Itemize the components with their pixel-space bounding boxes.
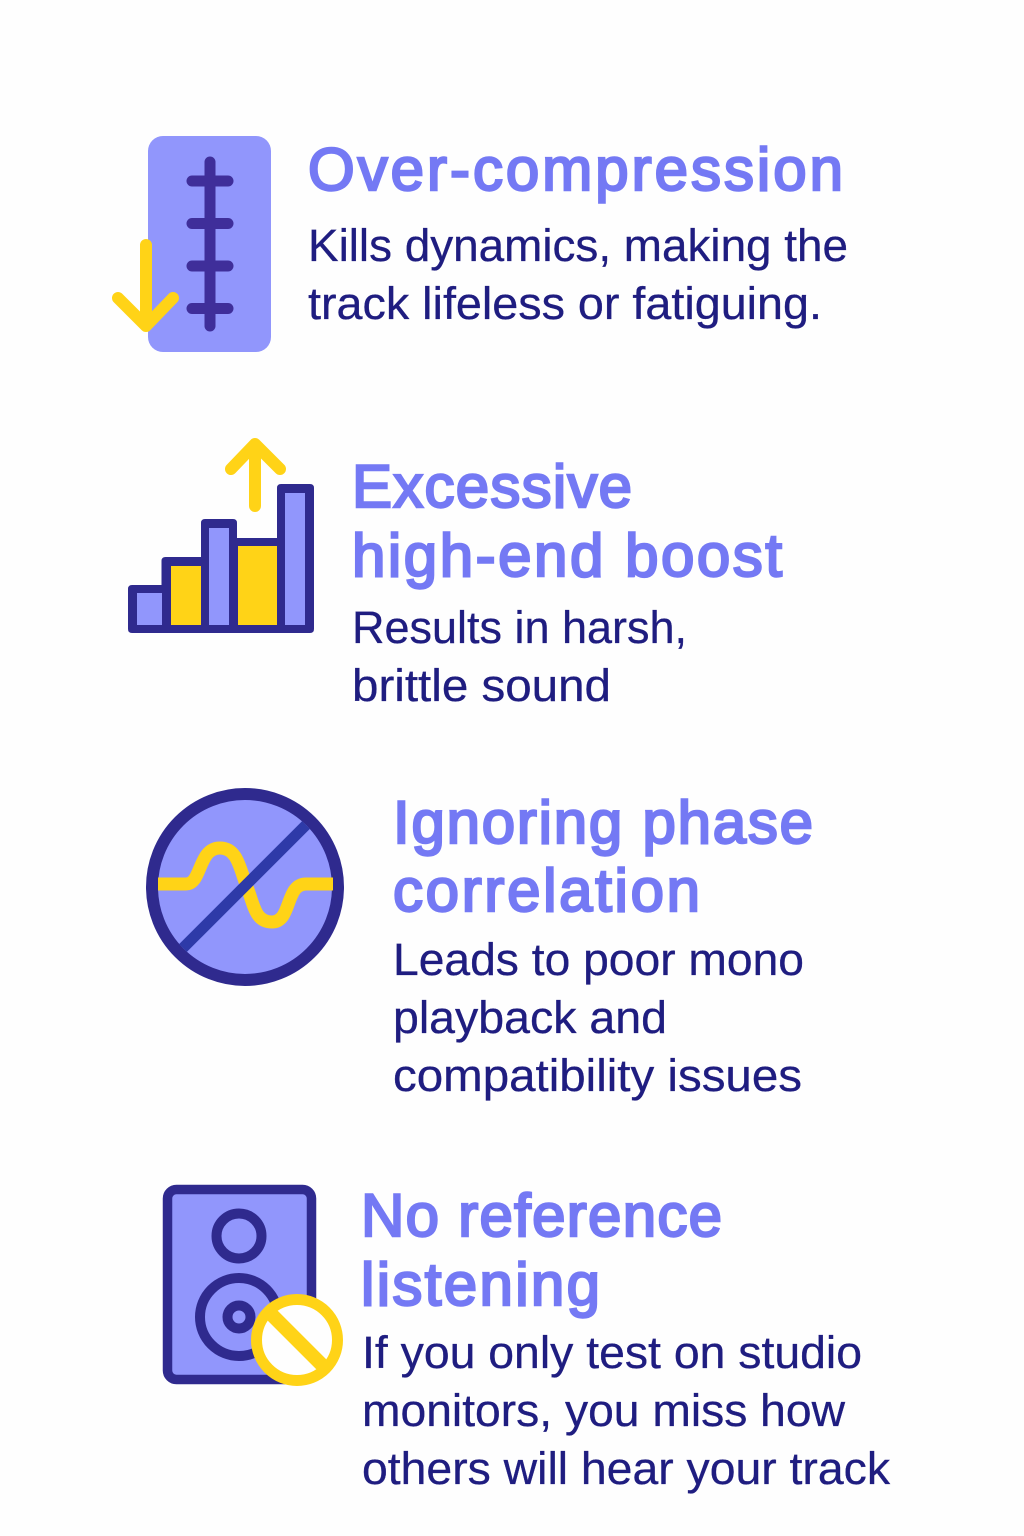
text: phase correlation description: Leads to poor mono: [393, 934, 804, 985]
heading: ignoring phase correlation: correlation: [393, 857, 700, 924]
text: reference listening description: [362, 1327, 890, 1494]
text: phase correlation description: playback and: [393, 992, 667, 1043]
text: over-compression description: track lifeless or fatiguing.: [308, 278, 822, 329]
panel: no reference listening: [168, 1182, 890, 1494]
text: phase correlation description: [393, 934, 804, 1101]
heading: ignoring phase correlation: Ignoring phase: [393, 789, 813, 856]
icon: compressor fader with down arrow: [118, 136, 271, 352]
text: reference listening description: monitors, you miss how: [362, 1385, 846, 1436]
heading: ignoring phase correlation: [393, 789, 813, 924]
heading: no reference listening: [361, 1182, 722, 1318]
panel: excessive high-end boost: [128, 444, 782, 711]
heading: excessive high-end boost: [352, 453, 782, 589]
text: high-end boost description: brittle sound: [352, 660, 611, 711]
text: phase correlation description: compatibility issues: [393, 1050, 802, 1101]
text: over-compression description: Kills dynamics, making the: [308, 220, 848, 271]
text: over-compression description: [308, 220, 848, 329]
panel: ignoring phase correlation: [152, 789, 813, 1101]
panel: over-compression: [118, 136, 848, 352]
icon: rising bars with up arrow: [128, 444, 314, 633]
heading: excessive high-end boost: high-end boost: [352, 522, 782, 589]
text: reference listening description: others will hear your track: [362, 1443, 890, 1494]
heading: excessive high-end boost: Excessive: [352, 453, 632, 520]
heading: over-compression: Over-compression: [308, 136, 843, 203]
text: reference listening description: If you only test on studio: [362, 1327, 862, 1378]
text: high-end boost description: Results in harsh,: [352, 602, 687, 653]
heading: no reference listening: No reference: [361, 1182, 722, 1249]
icon: speaker with prohibition sign: [168, 1190, 338, 1380]
text: high-end boost description: [352, 602, 687, 711]
heading: no reference listening: listening: [361, 1251, 600, 1318]
icon: crossed-out waveform: [152, 794, 338, 980]
